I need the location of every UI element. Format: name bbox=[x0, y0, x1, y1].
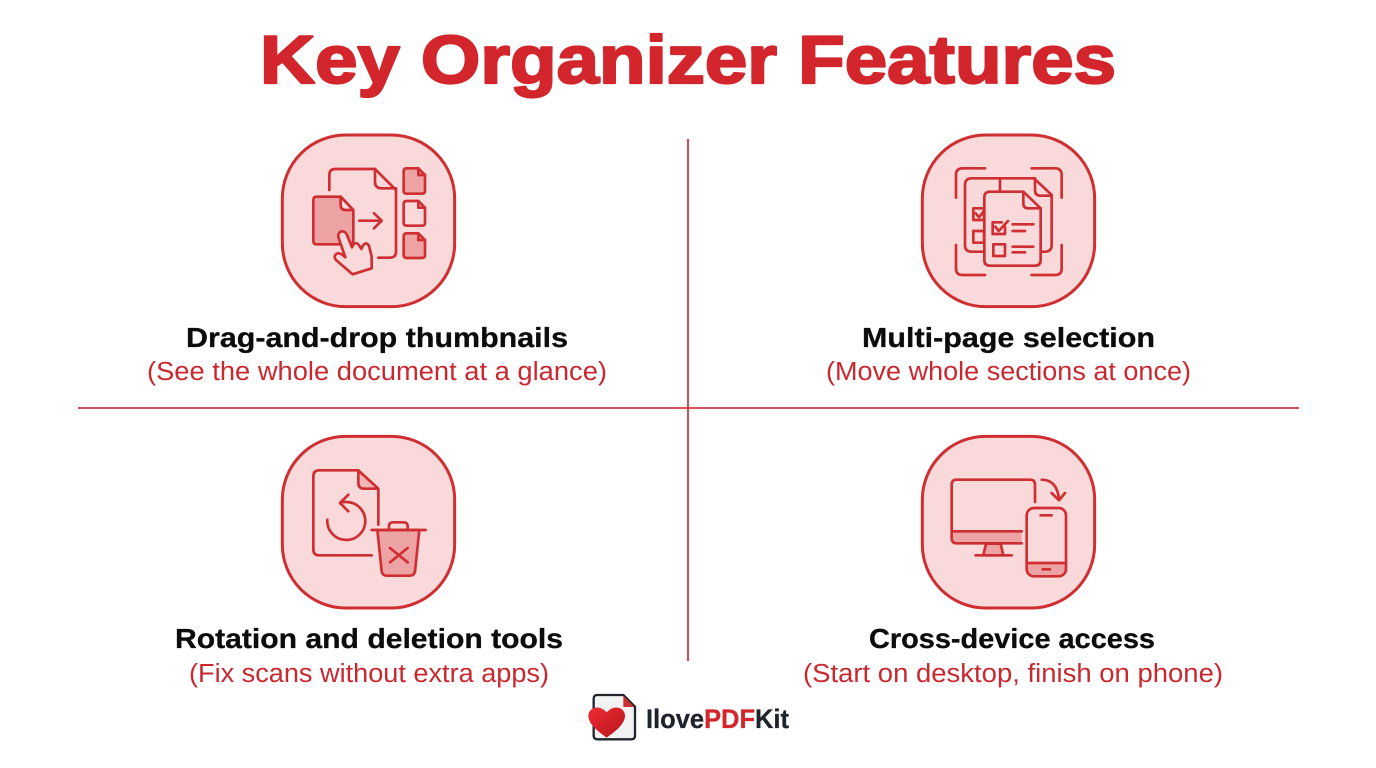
panel: drag-and-drop thumbnails bbox=[147, 135, 607, 386]
panel: multi-page selection bbox=[826, 135, 1191, 386]
panel: rotation and deletion tools bbox=[175, 436, 563, 688]
icon: heart on document bbox=[588, 695, 635, 739]
icon: document drag to thumbnails bbox=[282, 135, 455, 307]
heading: Cross-device access bbox=[869, 623, 1155, 654]
subheading: (Fix scans without extra apps) bbox=[189, 660, 549, 688]
horizontal divider bbox=[78, 407, 1299, 409]
title: Key Organizer Features bbox=[260, 22, 1116, 98]
subheading: (Start on desktop, finish on phone) bbox=[803, 660, 1223, 688]
icon: desktop to phone bbox=[922, 436, 1095, 608]
logo bbox=[588, 695, 789, 739]
subheading: (Move whole sections at once) bbox=[826, 358, 1191, 386]
icon: rotate document and trash bbox=[282, 436, 455, 608]
heading: Multi-page selection bbox=[862, 322, 1155, 353]
heading: Drag-and-drop thumbnails bbox=[186, 322, 568, 353]
wordmark: IlovePDFKit bbox=[646, 704, 789, 734]
icon: selected checklist pages bbox=[922, 135, 1095, 307]
vertical divider bbox=[687, 139, 689, 661]
heading: Rotation and deletion tools bbox=[175, 623, 563, 654]
panel: cross-device access bbox=[803, 436, 1223, 688]
subheading: (See the whole document at a glance) bbox=[147, 358, 607, 386]
